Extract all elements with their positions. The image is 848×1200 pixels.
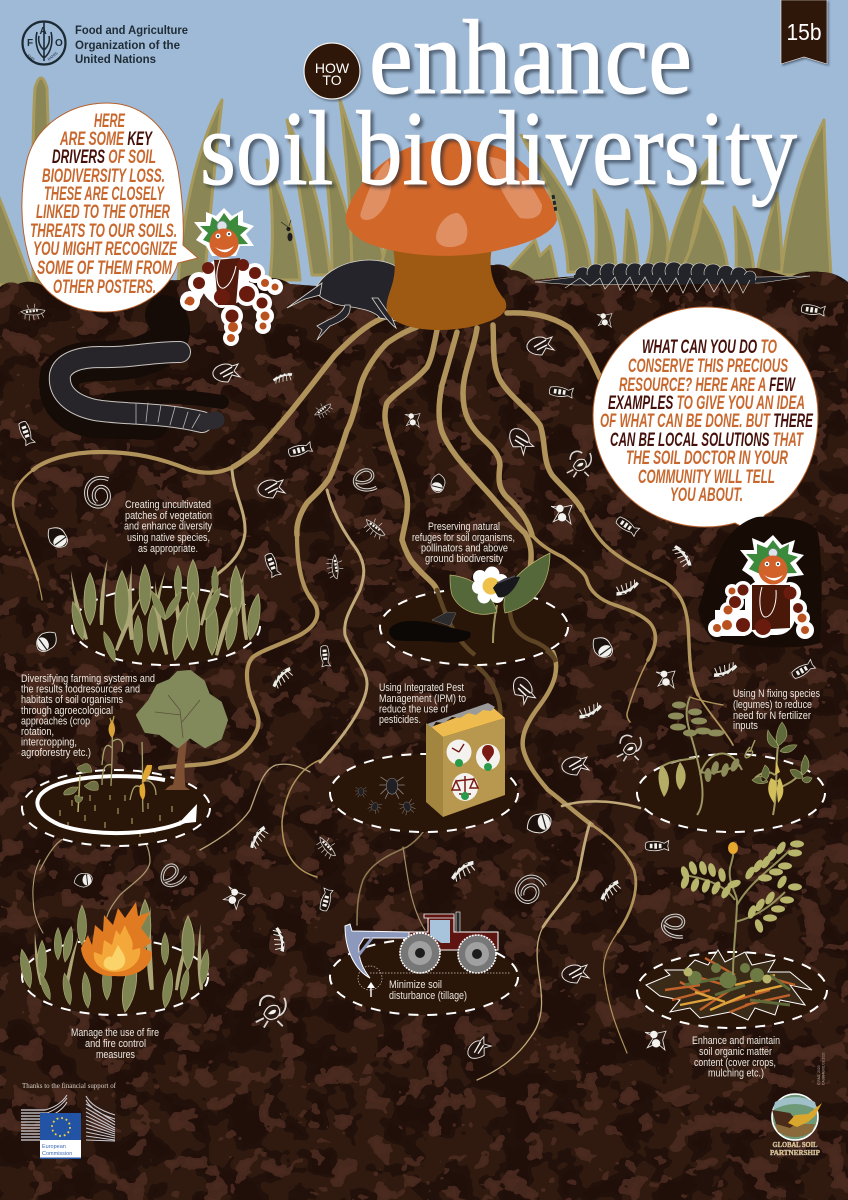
speech bubble: key drivers: BIODIVERSITY LOSS. (42, 166, 165, 187)
speech bubble: key drivers: DRIVERS OF SOIL (52, 147, 156, 168)
mushroom stem (387, 248, 506, 330)
caption: mulching etc.) (708, 1068, 764, 1080)
earthworm (60, 352, 216, 428)
speech bubble: what can you do: YOU ABOUT. (670, 485, 743, 506)
pesticide box (426, 703, 505, 817)
HOW TO circle (304, 43, 360, 99)
caption: Management (IPM) to (379, 693, 466, 705)
panel: soil organic matter (637, 840, 827, 1080)
panel: diversifying farming systems (21, 672, 226, 846)
plant (679, 840, 804, 975)
millipede on surface (535, 262, 810, 293)
speech bubble: key drivers: HERE (94, 111, 126, 132)
icon: FAO logo: FIAT (26, 53, 36, 63)
caption: soil organic matter (699, 1046, 772, 1058)
soil organisms scattered (18, 302, 825, 1062)
caption: Enhance and maintain (692, 1035, 780, 1047)
caption: disturbance (tillage) (389, 990, 467, 1002)
caption: as appropriate. (138, 543, 198, 555)
caption (389, 979, 467, 1002)
bean plant (64, 764, 98, 812)
seed marks (60, 795, 180, 837)
icon: location pin (476, 744, 500, 771)
caption: reduce the use of (379, 704, 449, 716)
speech bubble: what can you do (593, 307, 818, 532)
caption: need for N fertilizer (733, 710, 811, 722)
earthworm tunnel (59, 315, 222, 420)
caption: through agroecological (21, 705, 113, 717)
rotation arrow (37, 776, 190, 833)
caption: pesticides. (379, 714, 421, 726)
dashed ellipse (330, 939, 518, 1015)
caption: Diversifying farming systems and (21, 673, 155, 685)
sky background (0, 0, 848, 300)
caption (21, 673, 155, 759)
panel: fire management (17, 900, 211, 1061)
dashed ellipse (330, 754, 518, 832)
ant on grass (281, 220, 292, 241)
tree (138, 672, 226, 790)
root under refuge (437, 590, 556, 662)
mulch pile (646, 950, 812, 1020)
icon: flame (81, 902, 152, 976)
caption: Minimize soil (389, 979, 442, 991)
dashed ellipse (380, 589, 568, 665)
speech bubble: key drivers: THREATS TO OUR SOILS. (30, 221, 177, 242)
panel: vegetation patches (63, 499, 263, 665)
caption: using native species, (127, 532, 210, 544)
dashed ellipse (22, 770, 210, 846)
icon: Global Soil Partnership logo (770, 1094, 822, 1157)
caption (412, 521, 515, 565)
title: enhance (369, 0, 692, 116)
FAO name: United Nations (75, 52, 156, 66)
speech bubble: key drivers: SOME OF THEM FROM (37, 258, 173, 279)
plant with flower and bee (450, 553, 550, 643)
caption: approaches (crop (21, 716, 90, 728)
soil doctor character 1 (180, 208, 283, 346)
icon: clock (446, 740, 472, 767)
dashed ellipse (22, 939, 208, 1015)
caption (124, 499, 212, 555)
icon: scales (452, 773, 478, 801)
caption: measures (96, 1049, 135, 1061)
badge: 15b: 15b (786, 19, 822, 45)
FAO name: Food and Agriculture (75, 23, 188, 37)
mushroom (346, 140, 557, 330)
caption: habitats of soil organisms (21, 694, 123, 706)
panel: integrated pest management (330, 682, 518, 832)
caption: intercropping, (21, 736, 77, 748)
title (200, 0, 797, 207)
icon: Global Soil Partnership logo: PARTNERSHIP (770, 1148, 820, 1157)
mole in burrow (389, 612, 471, 643)
speech bubble: what can you do: WHAT CAN YOU DO TO (642, 337, 777, 358)
caption: the results foodresources and (21, 684, 140, 696)
copyright note: CA3884EN/1/03.2020 (822, 1052, 826, 1085)
caption: patches of vegetation (125, 510, 212, 522)
icon: European Commission logo (21, 1095, 115, 1159)
wheels (400, 933, 496, 973)
icon: FAO logo: A (40, 26, 47, 37)
small ant on cap (553, 195, 556, 212)
icon: Global Soil Partnership logo: GLOBAL SOIL (772, 1140, 818, 1149)
panel: natural refuges (380, 521, 568, 665)
speech bubble: key drivers (22, 103, 198, 312)
credit: financial support: Thanks to the financial support of (22, 1081, 116, 1090)
insects (355, 777, 417, 817)
FAO name (75, 23, 188, 66)
caption: Preserving natural (428, 521, 500, 533)
beetle on surface (287, 260, 402, 340)
depth guide (358, 966, 510, 997)
caption (692, 1035, 780, 1080)
panel: nitrogen fixing legumes (637, 688, 825, 832)
caption: agroforestry etc.) (21, 747, 91, 759)
caption: content (cover crops, (694, 1057, 776, 1069)
caption: (legumes) to reduce (733, 699, 812, 711)
copyright note (817, 1052, 826, 1085)
icon: FAO logo: PANIS (46, 50, 59, 62)
speech bubble: key drivers: THESE ARE CLOSELY (44, 184, 165, 205)
caption: Using N fixing species (733, 688, 820, 700)
caption (379, 682, 466, 726)
soil doctor character 2 in hole (698, 517, 822, 647)
panel: minimize tillage (330, 912, 518, 1015)
caption: rotation, (21, 726, 54, 738)
cap highlights (360, 157, 542, 247)
caption: pollinators and above (421, 542, 508, 554)
dashed ellipse (72, 587, 260, 665)
badge: 15b (781, 0, 827, 64)
speech bubble: key drivers: ARE SOME KEY (59, 129, 153, 150)
burnt grass (17, 900, 211, 1013)
icon: FAO logo: O (55, 38, 63, 49)
speech bubble: key drivers: LINKED TO THE OTHER (36, 202, 170, 223)
caption: ground biodiversity (425, 553, 503, 565)
caption: Manage the use of fire (71, 1027, 159, 1039)
legume plant left (658, 697, 755, 815)
caption: inputs (733, 720, 758, 732)
caption: and fire control (85, 1038, 146, 1050)
FAO name: Organization of the (75, 38, 180, 52)
icon: FAO logo: F (27, 38, 33, 49)
copyright note: © FAO, 2020 (817, 1065, 821, 1085)
HOW TO circle: TO (322, 72, 342, 88)
icon: European Commission logo: Commission (42, 1151, 72, 1157)
dashed ellipse (637, 952, 827, 1028)
icon: European Commission logo: European (42, 1144, 66, 1150)
grass patch (63, 559, 263, 663)
speech bubble: key drivers: YOU MIGHT RECOGNIZE (33, 239, 178, 260)
caption: and enhance diversity (124, 520, 212, 532)
roots network (13, 313, 733, 1080)
soil ground (0, 250, 848, 1200)
mushroom cap (346, 140, 557, 256)
caption: Creating uncultivated (125, 499, 211, 511)
maize plants (102, 716, 156, 812)
speech bubble: key drivers: OTHER POSTERS. (53, 277, 156, 298)
caption: Using Integrated Pest (379, 682, 464, 694)
grass blades behind the soil (0, 78, 831, 285)
caption: refuges for soil organisms, (412, 532, 515, 544)
tractor with plough (345, 912, 498, 978)
caption (71, 1027, 159, 1061)
legume plant right (752, 722, 812, 815)
HOW TO circle: HOW (315, 60, 350, 76)
caption (733, 688, 820, 732)
dashed ellipse (637, 754, 825, 832)
icon: FAO logo (22, 22, 66, 64)
